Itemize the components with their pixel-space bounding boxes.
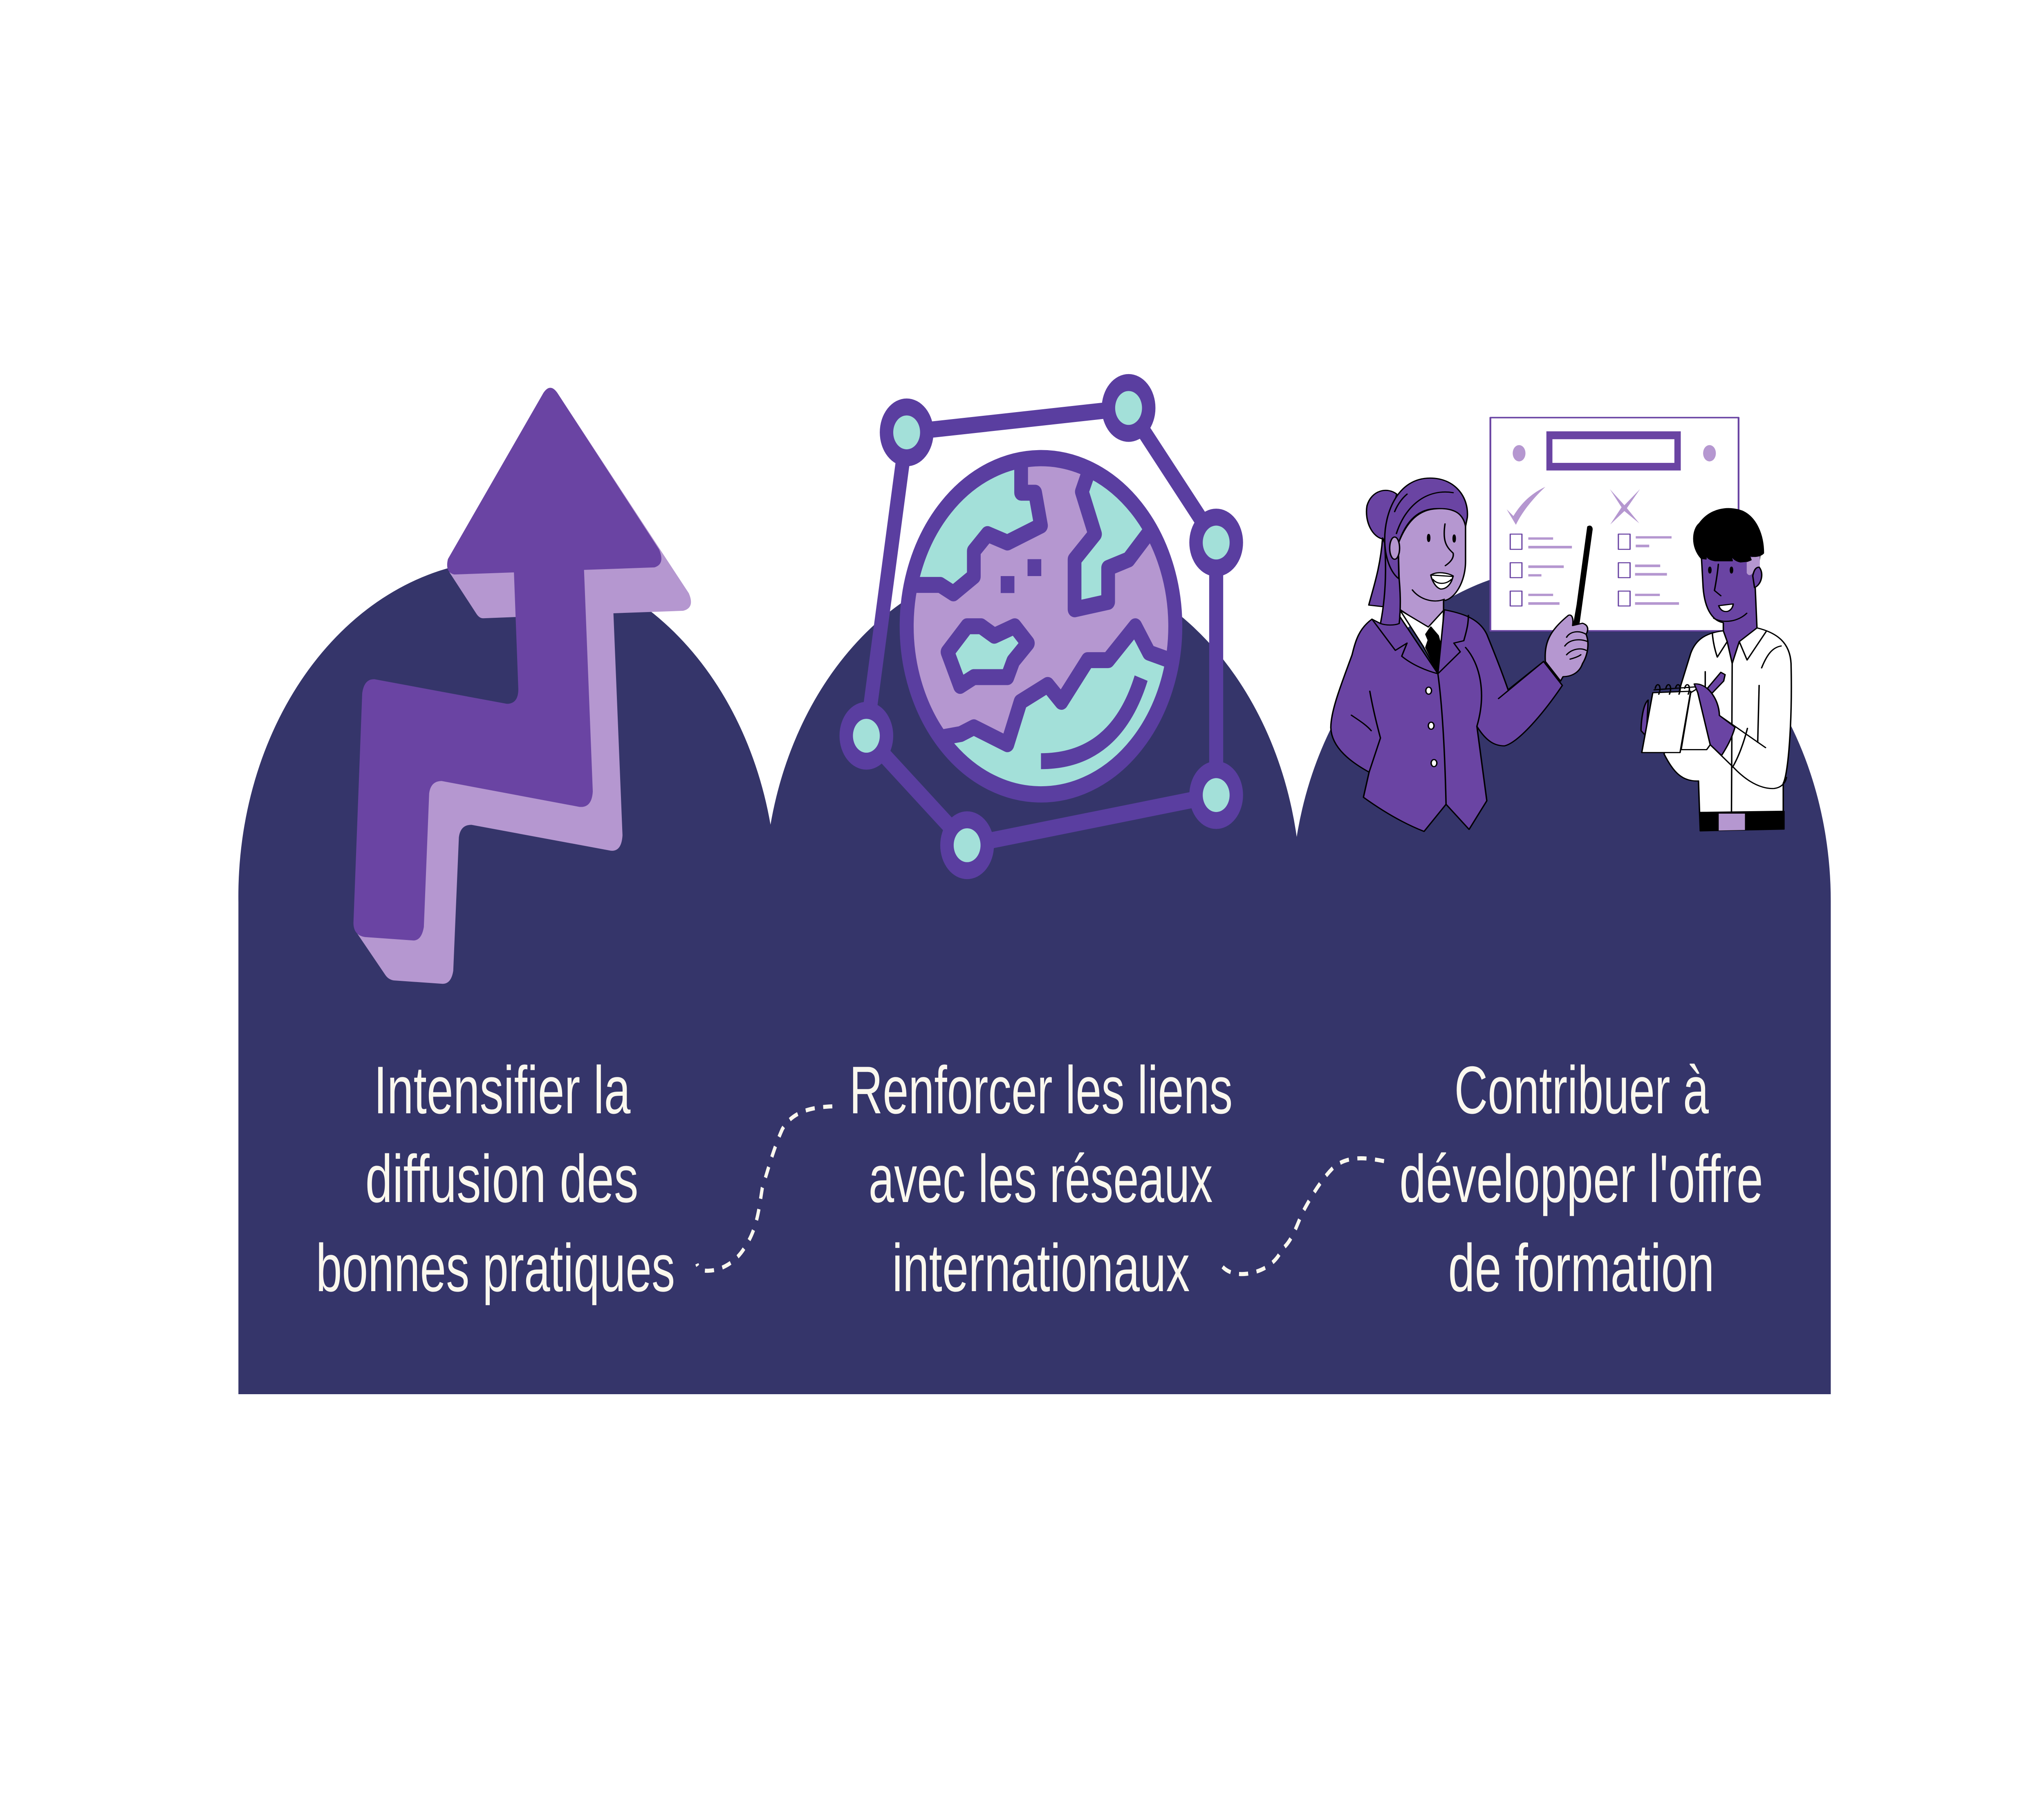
woman presenter — [1331, 478, 1592, 832]
icon: globe with network nodes — [840, 374, 1243, 879]
icon: zigzag rising arrow — [354, 388, 691, 984]
panel: navy three-lobed background — [238, 560, 1831, 1394]
globe ocean — [906, 458, 1176, 795]
text: first objective: bonnes pratiques — [316, 1230, 675, 1305]
arrow: dashed connector one — [697, 1106, 832, 1271]
text: third objective: Contribuer à — [1455, 1052, 1709, 1128]
man with notepad — [1641, 509, 1791, 831]
network nodes — [840, 374, 1243, 879]
node centres — [853, 391, 1230, 862]
text: second objective: Renforcer les liens — [849, 1052, 1233, 1128]
text: first objective: diffusion des — [365, 1141, 639, 1216]
illustration: two people in front of checklist board — [1331, 417, 1791, 832]
text: third objective: développer l'offre — [1399, 1141, 1763, 1216]
network links — [866, 408, 1216, 845]
text: third objective — [1399, 1052, 1763, 1305]
globe outline — [907, 458, 1175, 794]
globe land masses — [917, 467, 1167, 787]
text: third objective: de formation — [1448, 1230, 1715, 1305]
text: second objective — [849, 1052, 1233, 1305]
globe arc and islands — [1041, 678, 1141, 761]
text: second objective: internationaux — [892, 1230, 1190, 1305]
text: second objective: avec les réseaux — [869, 1141, 1213, 1216]
text: first objective — [316, 1052, 675, 1305]
checklist board — [1490, 417, 1739, 631]
text: first objective: Intensifier la — [374, 1052, 631, 1128]
arrow: dashed connector two — [1219, 1158, 1384, 1274]
